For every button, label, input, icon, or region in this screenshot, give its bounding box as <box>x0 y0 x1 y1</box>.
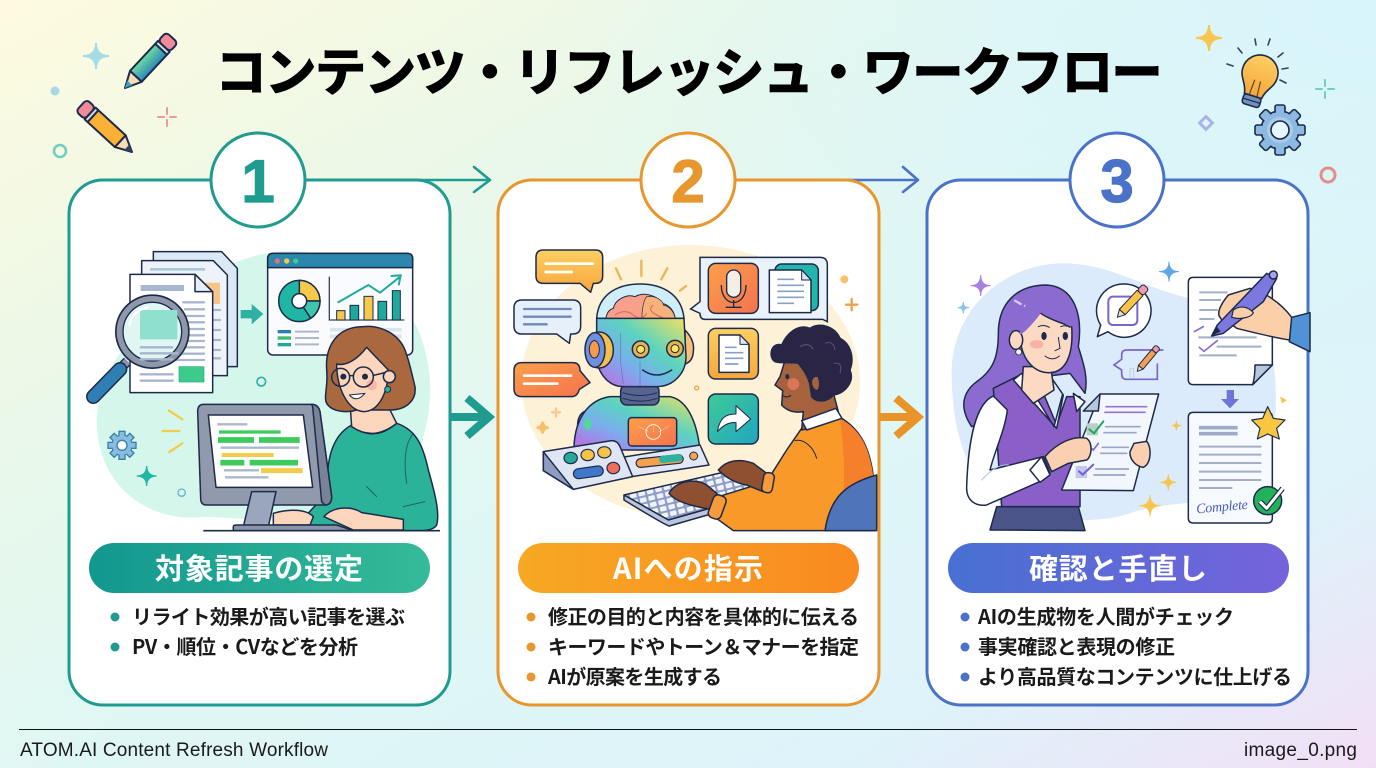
illustration: reviewer checking documents: Complete <box>1196 498 1248 517</box>
step 1 bullets: リライト効果が高い記事を選ぶ <box>132 601 405 630</box>
step 3 bullets: より高品質なコンテンツに仕上げる <box>978 661 1292 690</box>
step 3 label <box>948 543 1289 593</box>
icon: gear top right <box>1255 105 1305 155</box>
icon: orange pencil <box>76 99 137 158</box>
badge: number 2: 2 <box>671 148 705 215</box>
big arrow: 2 to 3 <box>880 398 918 436</box>
step 1 label: 対象記事の選定 <box>155 546 363 588</box>
badge: number 1: 1 <box>241 148 275 215</box>
panel: step 1 <box>69 133 450 705</box>
footer <box>19 730 1357 761</box>
step 2 label <box>518 543 859 593</box>
step 1 bullets: PV・順位・CVなどを分析 <box>132 631 358 660</box>
big arrow: 1 to 2 <box>451 398 489 436</box>
illustration: person instructing AI robot <box>514 245 877 531</box>
badge: number 2 <box>641 133 735 227</box>
icon: green pencil <box>119 32 178 93</box>
step 2 bullets: キーワードやトーン＆マナーを指定 <box>548 631 859 660</box>
badge: number 3 <box>1070 133 1164 227</box>
icon: light bulb <box>1227 39 1288 111</box>
decoration: top-right sparkles <box>1196 25 1335 182</box>
step 1 bullets <box>110 601 405 660</box>
panel: step 3 <box>927 133 1310 705</box>
step 1 label <box>89 543 430 593</box>
decoration: top-left sparkles <box>50 43 176 157</box>
illustration: reviewer checking documents <box>952 262 1310 531</box>
illustration: analyst at monitor <box>93 251 440 531</box>
step 3 bullets <box>960 601 1292 690</box>
step 3 bullets: 事実確認と表現の修正 <box>978 631 1175 660</box>
step 3 bullets: AIの生成物を人間がチェック <box>977 601 1234 630</box>
step 2 bullets: 修正の目的と内容を具体的に伝える <box>548 601 859 630</box>
title: コンテンツ・リフレッシュ・ワークフロー <box>215 31 1163 106</box>
panel: step 2 <box>498 133 879 705</box>
step 2 label: AIへの指示 <box>612 546 763 588</box>
arrow: step 1 to 2 top <box>307 167 490 192</box>
footer: ATOM.AI Content Refresh Workflow <box>20 740 328 761</box>
arrow: step 2 to 3 top <box>846 167 918 192</box>
badge: number 3: 3 <box>1100 148 1134 215</box>
step 2 bullets <box>526 601 859 690</box>
badge: number 1 <box>211 133 305 227</box>
step 3 label: 確認と手直し <box>1029 546 1207 588</box>
step 2 bullets: AIが原案を生成する <box>547 661 722 690</box>
footer: image_0.png <box>1244 740 1357 761</box>
